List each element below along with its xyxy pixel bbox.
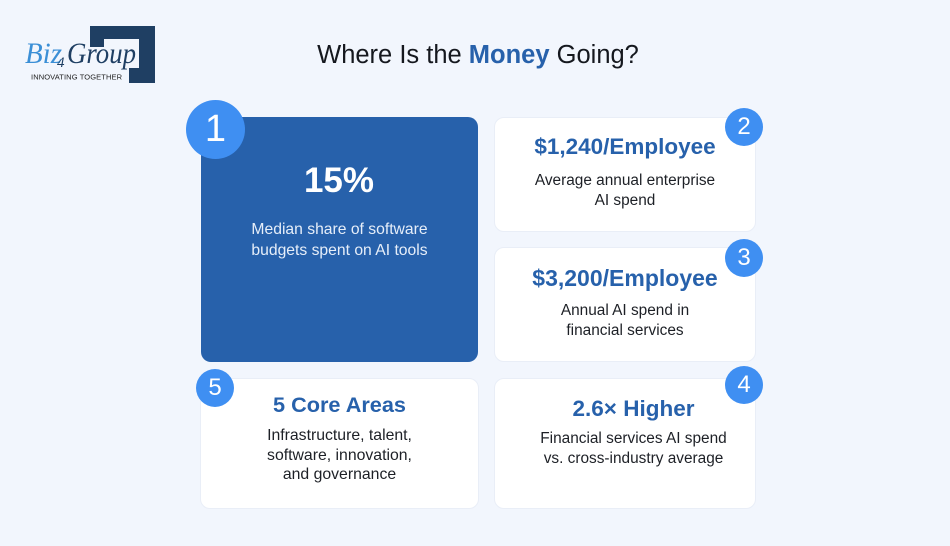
- icon: logo square bracket: [90, 26, 155, 83]
- panel: 2.6x: [494, 378, 756, 509]
- logo: [25, 26, 155, 83]
- title: Where Is the Money Going?: [317, 41, 639, 69]
- stat heading: $1,240/Employee: [534, 134, 716, 159]
- description: budgets spent on AI tools: [251, 242, 428, 259]
- badge 4: [725, 366, 763, 404]
- badge 2: [725, 108, 763, 146]
- logo: 4: [57, 55, 65, 71]
- description: Infrastructure, talent,: [267, 427, 412, 444]
- description: [535, 172, 715, 208]
- description: Median share of software: [251, 221, 428, 238]
- logo wordmark: Biz: [25, 37, 62, 70]
- panel: $3,200: [494, 247, 756, 362]
- description: Average annual enterprise: [535, 172, 715, 189]
- badge 1: [186, 100, 245, 159]
- description: and governance: [283, 466, 396, 483]
- description: [267, 427, 412, 483]
- stat: 15%: 15%: [304, 161, 374, 200]
- panel: $1,240: [494, 117, 756, 232]
- stat heading: 2.6× Higher: [573, 396, 694, 421]
- panel: 15%: [201, 117, 478, 362]
- description: [561, 302, 689, 338]
- badge 1: 1: [205, 108, 226, 150]
- badge 4: 4: [737, 371, 751, 398]
- badge 3: [725, 239, 763, 277]
- description: software, innovation,: [267, 446, 412, 464]
- panel: 5 core areas: [200, 378, 479, 509]
- description: financial services: [566, 322, 684, 338]
- badge 2: 2: [737, 113, 751, 140]
- stat heading: 5 Core Areas: [273, 392, 406, 417]
- logo: Group: [67, 37, 136, 70]
- description: Financial services AI spend: [540, 430, 727, 447]
- logo tagline: INNOVATING TOGETHER: [31, 72, 123, 82]
- badge 3: 3: [737, 244, 751, 271]
- stat heading: $3,200/Employee: [532, 265, 718, 291]
- description: [540, 430, 727, 466]
- badge 5: 5: [208, 374, 222, 401]
- badge 5: [196, 369, 234, 407]
- description: [251, 221, 428, 259]
- description: Annual AI spend in: [561, 302, 689, 319]
- description: vs. cross-industry average: [544, 450, 723, 466]
- description: AI spend: [595, 192, 655, 208]
